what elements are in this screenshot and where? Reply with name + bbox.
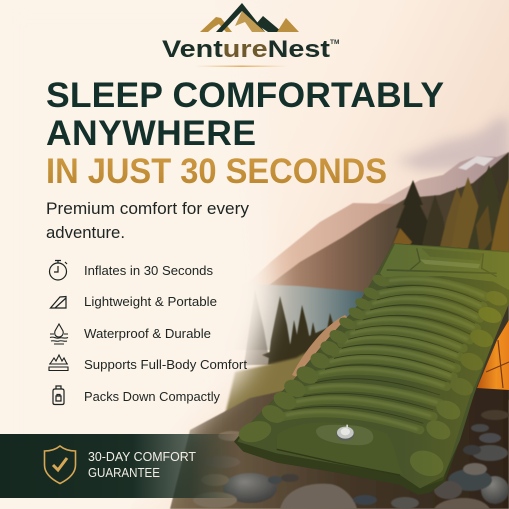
brand name: Vent ure Nest	[162, 36, 330, 63]
far snowy mountain	[340, 152, 509, 260]
subtitle: adventure.	[46, 223, 125, 242]
tent glow	[477, 320, 509, 390]
mat side beads	[236, 272, 509, 481]
mat pillow	[380, 244, 509, 290]
title: ANYWHERE	[46, 113, 256, 153]
guarantee text: 30-DAY COMFORT	[88, 450, 196, 464]
subtitle: Premium comfort for every	[46, 199, 250, 218]
ground	[170, 360, 509, 509]
title	[46, 75, 444, 191]
feature: comfort	[49, 355, 248, 372]
tent flap	[292, 315, 350, 378]
title: IN JUST 30 SECONDS	[46, 151, 387, 191]
shore meadow	[225, 345, 320, 425]
subtitle	[46, 199, 250, 242]
feature: packs: Packs Down Compactly	[84, 390, 221, 404]
feature: waterproof: Waterproof & Durable	[84, 327, 211, 341]
shield icon	[44, 446, 76, 484]
feature list	[49, 260, 248, 404]
logo	[162, 3, 339, 67]
lake	[225, 283, 364, 350]
lakeside trees	[244, 290, 345, 372]
middle mountain range	[240, 203, 395, 290]
feature: waterproof	[50, 324, 211, 344]
mat seams	[292, 286, 482, 423]
clouds	[395, 118, 509, 170]
mat base	[234, 243, 509, 495]
sleeping mat	[234, 243, 509, 495]
feature: inflates	[50, 260, 213, 280]
feature: lightweight: Lightweight & Portable	[84, 295, 217, 309]
pump valve	[336, 425, 354, 441]
guarantee banner	[0, 434, 240, 498]
mat baffles	[283, 280, 487, 430]
feature: packs	[53, 386, 221, 404]
logo mountains	[200, 3, 299, 32]
rocks	[193, 410, 509, 509]
left cream fade	[0, 0, 272, 509]
forest mountain	[268, 152, 509, 400]
guarantee text	[88, 450, 196, 480]
upper trees	[388, 165, 509, 256]
light overlay	[240, 243, 509, 488]
logo underline	[195, 66, 288, 67]
feature: inflates: Inflates in 30 Seconds	[84, 264, 213, 278]
mat highlights	[287, 279, 483, 429]
guarantee text: GUARANTEE	[88, 466, 160, 480]
title: SLEEP COMFORTABLY	[46, 75, 444, 115]
feature: comfort: Supports Full-Body Comfort	[84, 358, 248, 372]
trademark: TM	[330, 39, 339, 46]
mat foot section	[277, 422, 403, 475]
